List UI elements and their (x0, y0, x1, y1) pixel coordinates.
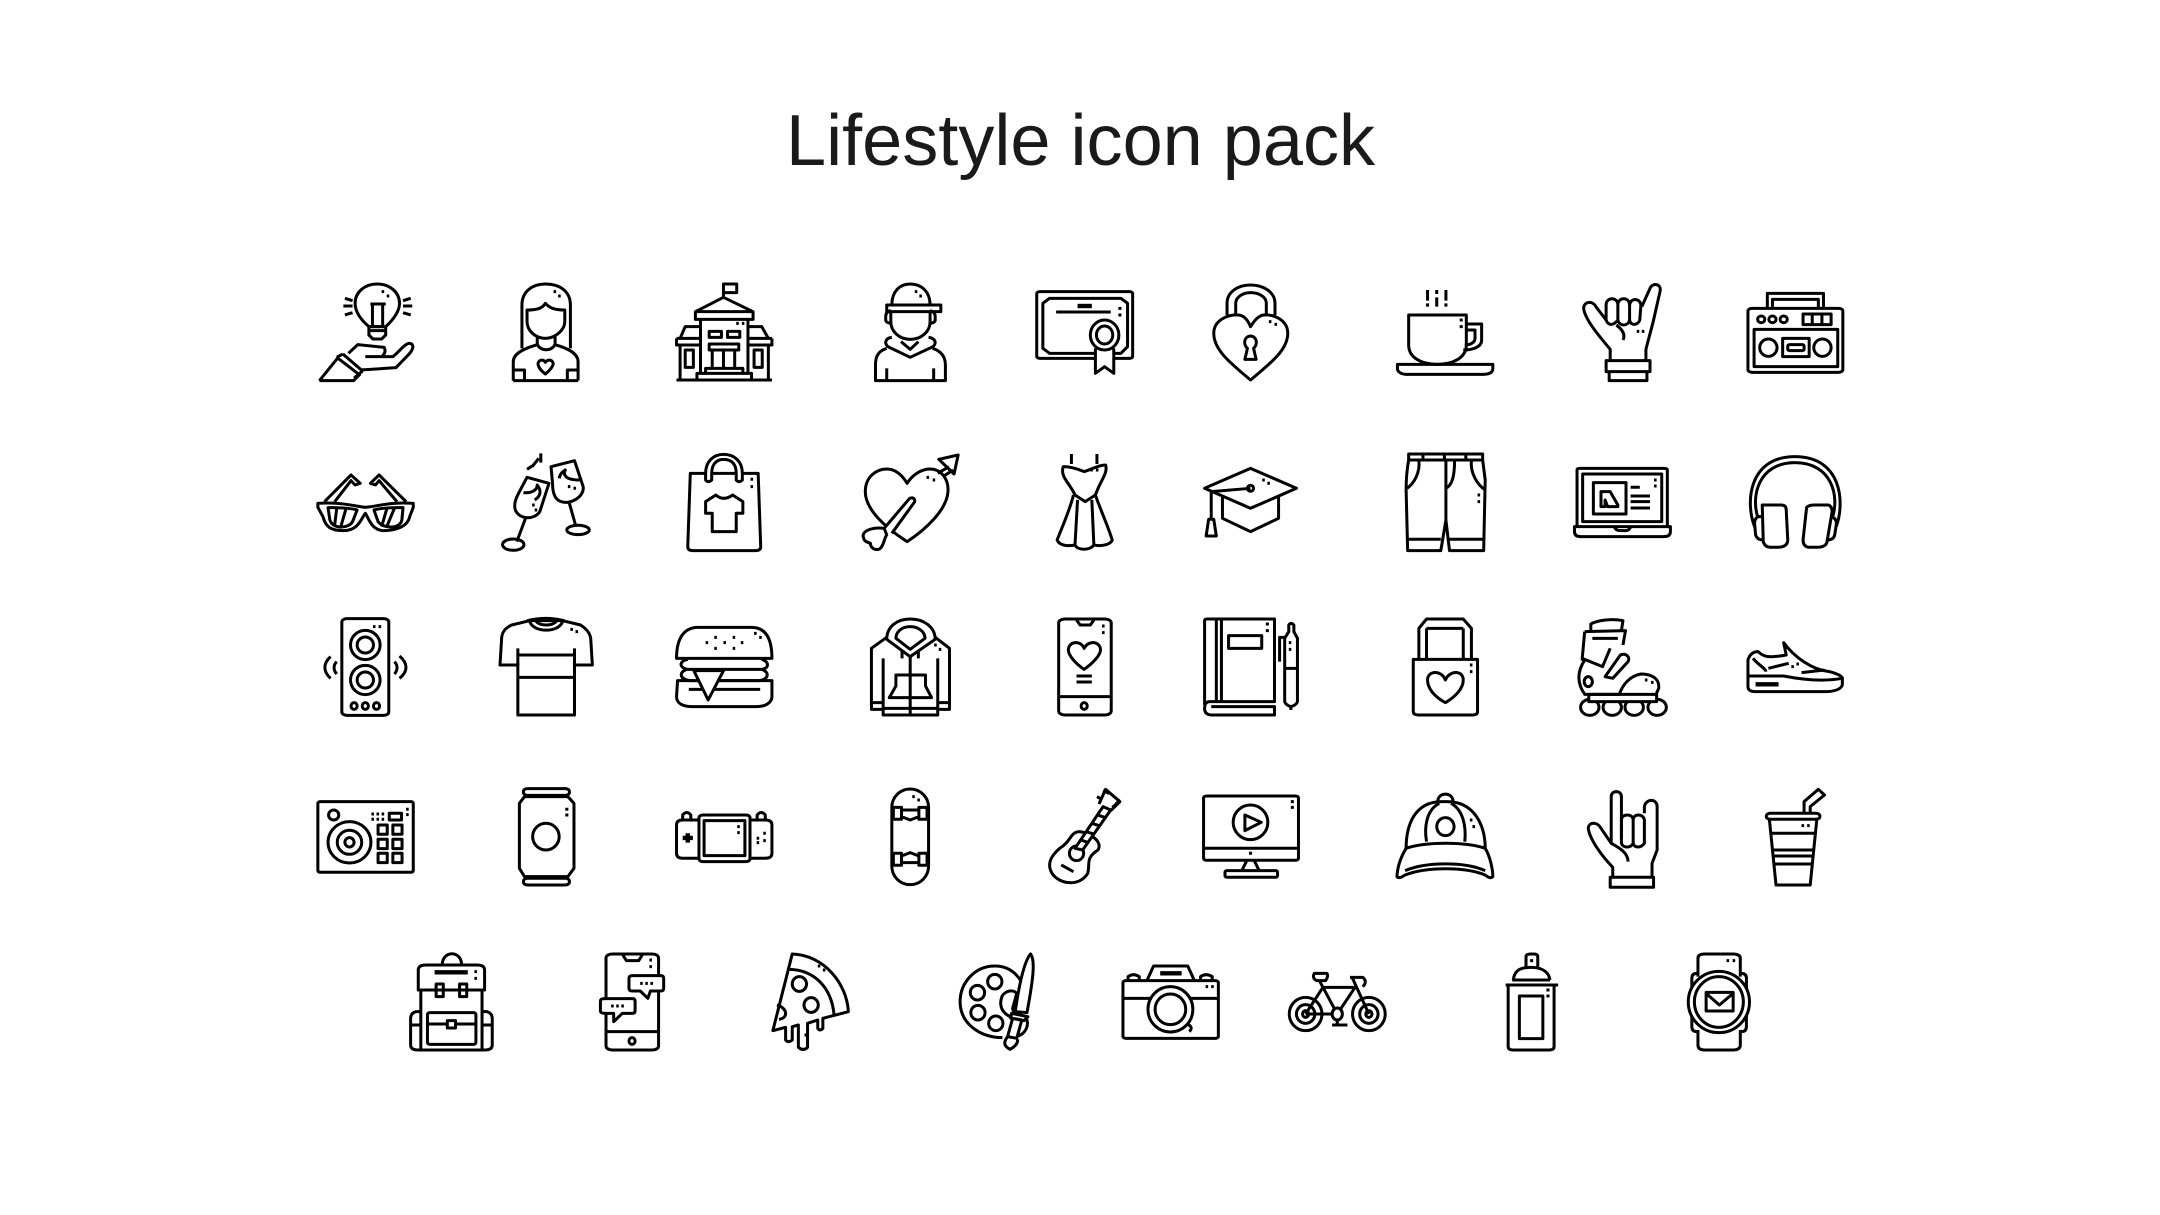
icon: shopping bag with shirt (688, 454, 761, 551)
icon: shaka hand (1584, 285, 1660, 381)
icon: heart with arrow (863, 455, 958, 550)
icon: camera (1123, 966, 1218, 1038)
icon: handheld game console (677, 812, 772, 862)
icon: laptop (1574, 468, 1670, 537)
icon: bicycle (1289, 973, 1385, 1031)
icon: drink cup with straw (1766, 789, 1824, 885)
icon: tote bag with heart (1413, 619, 1478, 715)
icon: phone with heart (1059, 619, 1111, 715)
icon: heart padlock (1214, 285, 1288, 380)
icon: video monitor (1204, 796, 1298, 877)
icon: dress (1057, 454, 1112, 549)
icon: hoodie (871, 619, 949, 715)
icon: sneaker (1748, 643, 1842, 692)
icon: dj mixer (318, 802, 413, 872)
icon: woman (513, 284, 578, 381)
icon: champagne toast (503, 453, 589, 550)
icon: guitar (1050, 789, 1120, 883)
icon: certificate (1037, 292, 1133, 373)
icon: smartwatch with envelope (1688, 954, 1749, 1050)
icon: boombox (1748, 293, 1843, 372)
icon: notebook and pen (1205, 619, 1297, 715)
icon: headphones (1750, 457, 1840, 547)
icon: skateboard (892, 789, 929, 885)
icon: t-shirt (500, 618, 592, 715)
icon: phone with chat bubbles (600, 954, 664, 1050)
icon: palette and brush (960, 954, 1033, 1049)
icon: baseball cap (1397, 794, 1493, 878)
icon: speaker (325, 619, 406, 715)
icon: graduation cap (1205, 468, 1296, 536)
icon: spray can (1506, 954, 1558, 1050)
icon: shorts (1406, 454, 1485, 551)
icon: soda can (519, 789, 574, 885)
title: Lifestyle icon pack (786, 101, 1375, 181)
icon: light bulb over hand (319, 284, 413, 381)
icon: pizza slice (773, 954, 848, 1049)
icon: school building (677, 284, 772, 380)
icon: rock hand (1588, 792, 1657, 887)
icon: coffee cup (1397, 290, 1493, 374)
icon: burger (677, 627, 772, 707)
icon: boy with cap (876, 284, 945, 381)
icon: backpack (411, 954, 492, 1050)
icon: roller skate (1579, 620, 1666, 715)
icon: sunglasses (318, 475, 413, 531)
